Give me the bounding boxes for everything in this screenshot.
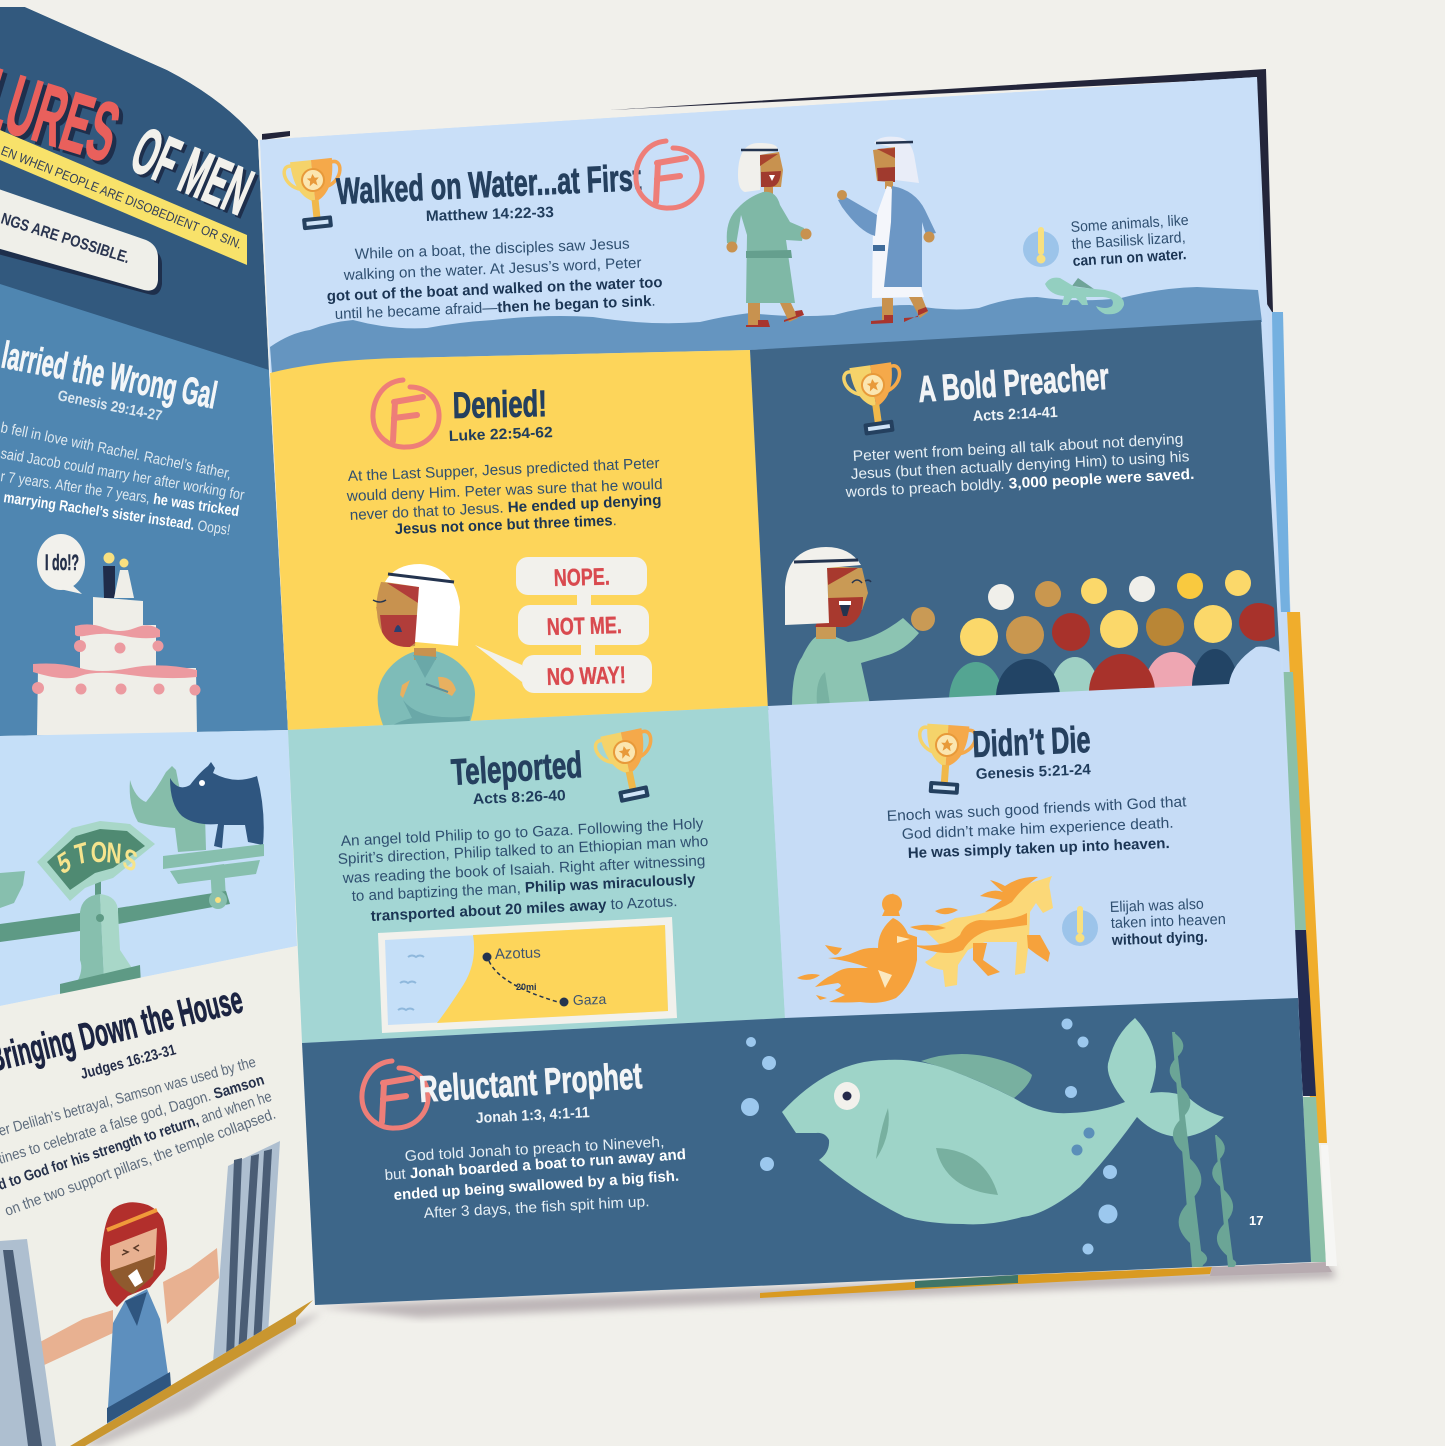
- figure: Peter: [726, 143, 812, 327]
- figure: Peter preaching: [785, 547, 935, 706]
- water wave: [270, 287, 1262, 374]
- Samson arms: [40, 1248, 219, 1367]
- body text: was reading the book of Isaiah. Right after witnessing: [341, 852, 706, 887]
- trophy icon: [283, 157, 346, 232]
- body text: [326, 235, 663, 323]
- body text: [384, 1134, 687, 1222]
- callout: Elijah: without dying.: [1111, 929, 1208, 949]
- callout: basilisk lizard: can run on water.: [1072, 246, 1187, 270]
- panel: scale with rhinos: [0, 730, 297, 1006]
- book shadow and bottom edge: [70, 1262, 1336, 1446]
- crowd: [949, 570, 1275, 738]
- icon: lizard: [1045, 278, 1124, 314]
- body text: [0, 419, 246, 539]
- callout: Elijah: Elijah was also: [1110, 896, 1204, 916]
- heading: of men: OF MEN: [122, 113, 263, 229]
- heading: of men: [132, 129, 259, 219]
- Samson: [101, 1202, 171, 1424]
- map: Azotus to Gaza: [378, 917, 677, 1033]
- panel: failures of men header: [0, 7, 269, 372]
- reference: Acts 8:26-40: [472, 787, 566, 808]
- map: Azotus to Gaza: Azotus: [495, 944, 541, 963]
- body text: Jesus (but then actually denying Him) to using his: [850, 448, 1190, 483]
- heading: Teleported: [450, 744, 583, 793]
- heading: Didn’t Die: [972, 719, 1091, 765]
- body text: [886, 793, 1188, 862]
- scale dial: 5 tons: 5TONS: [54, 836, 140, 881]
- white callout pill: [0, 186, 162, 295]
- body text: d to God for his strength to return, and when he: [0, 1088, 274, 1194]
- panel: didn't die: [768, 647, 1298, 1018]
- body text: [0, 1054, 278, 1220]
- speech bubbles: nope, not me, no way: NOT ME.: [546, 612, 622, 641]
- panel: a bold preacher: [750, 320, 1280, 738]
- body text: but Jonah boarded a boat to run away and: [384, 1146, 687, 1184]
- body text: [844, 431, 1195, 501]
- body text: [337, 815, 709, 925]
- reference: Luke 22:54-62: [449, 424, 553, 445]
- icon: F grade: [362, 1061, 428, 1128]
- reference: Acts 2:14-41: [972, 404, 1058, 425]
- map: Azotus to Gaza: Gaza: [573, 991, 607, 1008]
- body text: marrying Rachel’s sister instead. Oops!: [2, 489, 231, 539]
- speech bubble: I do!?: I do!?: [45, 550, 79, 575]
- panel: denied: [270, 350, 768, 730]
- icon: alert: [1023, 227, 1059, 267]
- body text: Enoch was such good friends with God that: [886, 793, 1188, 825]
- speech bubbles: nope, not me, no way: NO WAY!: [546, 662, 626, 691]
- body text: God told Jonah to preach to Nineveh,: [404, 1134, 665, 1165]
- body text: [345, 455, 663, 538]
- body text: ended up being swallowed by a big fish.: [393, 1168, 680, 1204]
- wedding cake: [32, 552, 200, 735]
- heading: A Bold Preacher: [917, 356, 1110, 410]
- callout: Elijah: [1062, 896, 1226, 949]
- body text: to and baptizing the man, Philip was miraculously: [351, 871, 696, 905]
- body text: words to preach boldly. 3,000 people were saved.: [844, 466, 1195, 501]
- bubbles: [741, 1018, 1118, 1254]
- body text: walking on the water. At Jesus’s word, Peter: [342, 255, 642, 284]
- fish: [782, 1018, 1224, 1224]
- body text: tines to celebrate a false god, Dagon. Samson: [0, 1071, 266, 1168]
- body text: b fell in love with Rachel. Rachel’s father,: [0, 419, 233, 483]
- figure: Jesus: [837, 137, 936, 324]
- chariot of fire: [797, 876, 1053, 1003]
- callout: basilisk lizard: Some animals, like: [1070, 212, 1189, 236]
- page number: 17: [1249, 1213, 1263, 1228]
- speech bubbles: nope, not me, no way: NOPE.: [553, 564, 610, 592]
- body text: said Jacob could marry her after working for: [0, 445, 246, 504]
- body text: Peter went from being all talk about not denying: [852, 431, 1184, 465]
- figure: Peter denying: [373, 564, 475, 730]
- heading: Denied!: [452, 383, 547, 426]
- body text: until he became afraid—then he began to sink.: [334, 293, 656, 323]
- reference: Jonah 1:3, 4:1-11: [475, 1104, 590, 1127]
- body text: He was simply taken up into heaven.: [908, 835, 1170, 862]
- pillars: [0, 1141, 280, 1446]
- seaweed: [1170, 1032, 1236, 1267]
- trophy icon: [843, 361, 907, 437]
- body text: While on a boat, the disciples saw Jesus: [355, 235, 630, 263]
- panel: reluctant prophet: [302, 998, 1311, 1305]
- scale beam and stand: [0, 880, 230, 996]
- panel: walked on water: [260, 77, 1262, 374]
- speech bubbles: nope, not me, no way: [475, 557, 652, 693]
- reference: Genesis 5:21-24: [975, 761, 1092, 783]
- right pan: [163, 844, 264, 894]
- reference: Genesis 29:14-27: [56, 387, 163, 425]
- reference: Judges 16:23-31: [79, 1041, 178, 1083]
- body text: Spirit’s direction, Philip talked to an Ethiopian man who: [337, 833, 709, 868]
- heading: of men: OF MEN: [125, 116, 266, 232]
- callout: basilisk lizard: the Basilisk lizard,: [1071, 229, 1186, 253]
- left pan: [0, 871, 25, 908]
- callout: Elijah: taken into heaven: [1111, 911, 1226, 932]
- trophy icon: [594, 727, 663, 806]
- speech bubble: I do!?: [37, 534, 85, 594]
- left page: [0, 7, 313, 1446]
- body text: transported about 20 miles away to Azotus.: [370, 893, 678, 925]
- body text: on the two support pillars, the temple collapsed.: [3, 1106, 278, 1220]
- reference: Matthew 14:22-33: [426, 204, 554, 225]
- panel: bringing down the house: [0, 946, 313, 1446]
- heading: Reluctant Prophet: [418, 1055, 643, 1110]
- heading: larried the Wrong Gal: [0, 335, 220, 417]
- body text: r 7 years. After the 7 years, he was tricked: [0, 468, 240, 520]
- yellow banner: EN WHEN PEOPLE ARE DISOBEDIENT OR SIN.: [0, 143, 244, 252]
- panel: married the wrong gal: [0, 284, 288, 736]
- rhinos: [130, 762, 264, 852]
- callout: basilisk lizard: [1023, 212, 1189, 270]
- icon: F grade: [373, 380, 439, 447]
- map: Azotus to Gaza: 20mi: [516, 982, 537, 992]
- body text: At the Last Supper, Jesus predicted that Peter: [347, 455, 660, 485]
- white callout pill: NGS ARE POSSIBLE.: [0, 211, 132, 267]
- panel: teleported: [288, 706, 785, 1043]
- icon: alert: [1062, 906, 1098, 946]
- icon: F grade: [636, 141, 702, 208]
- trophy icon: [916, 723, 976, 796]
- scale dial: 5 tons: [37, 821, 155, 901]
- body text: After 3 days, the fish spit him up.: [423, 1193, 650, 1222]
- body text: Jesus not once but three times.: [394, 512, 617, 538]
- body text: never do that to Jesus. He ended up denying: [349, 492, 662, 524]
- body text: er Delilah’s betrayal, Samson was used by the: [0, 1054, 258, 1140]
- body text: got out of the boat and walked on the water too: [326, 274, 663, 305]
- heading: failures: [0, 68, 124, 165]
- body text: would deny Him. Peter was sure that he would: [345, 476, 663, 505]
- body text: An angel told Philip to go to Gaza. Following the Holy: [340, 815, 704, 850]
- right page base: [260, 77, 1310, 1305]
- book cover edge and colored tabs: [262, 69, 1337, 1266]
- heading: Walked on Water...at First: [335, 157, 642, 212]
- body text: God didn’t make him experience death.: [901, 815, 1174, 843]
